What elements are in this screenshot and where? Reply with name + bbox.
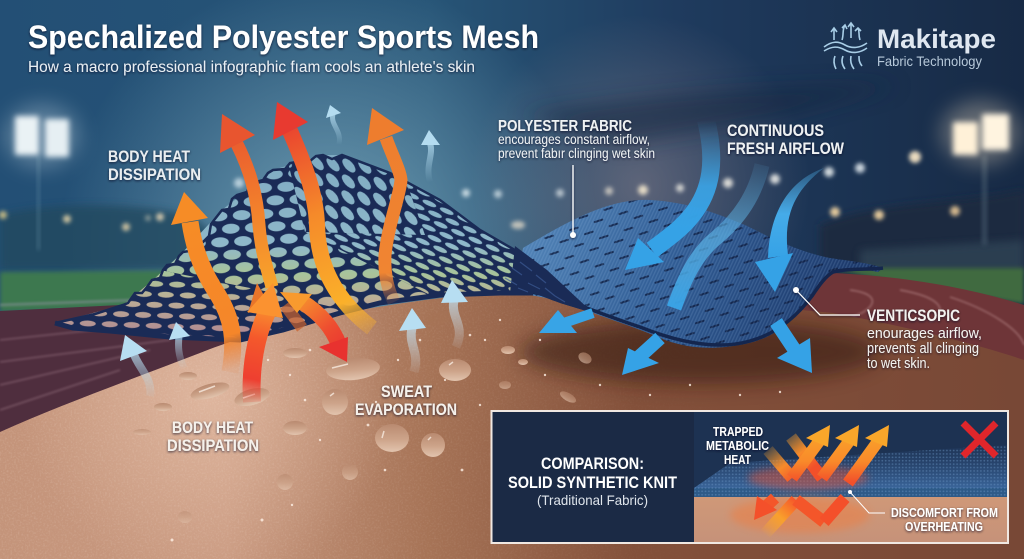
title block bbox=[28, 19, 539, 76]
callout: polyester fabric: encourages constant airflow, bbox=[498, 132, 650, 147]
bokeh lights bbox=[0, 151, 960, 231]
comparison heading bbox=[508, 455, 677, 508]
solid woven fabric section bbox=[515, 200, 883, 348]
brand tagline: Fabric Technology bbox=[877, 53, 982, 69]
comparison heading: SOLID SYNTHETIC KNIT bbox=[508, 474, 677, 492]
callout: venticsopic: VENTICSOPIC bbox=[867, 307, 960, 325]
label: trapped metabolic heat: METABOLIC bbox=[706, 439, 769, 453]
arrow: orange heat arrow 4 bbox=[367, 108, 404, 302]
label: continuous fresh airflow: FRESH AIRFLOW bbox=[727, 139, 845, 158]
title: Spechalized Polyester Sports Mesh bbox=[28, 19, 539, 55]
label: body heat dissipation bottom: BODY HEAT bbox=[172, 419, 253, 437]
callout: polyester fabric: prevent fabır clinging wet skin bbox=[498, 146, 655, 161]
panel: comparison solid synthetic knit bbox=[492, 411, 1008, 543]
label: body heat dissipation top: BODY HEAT bbox=[108, 147, 191, 166]
label: continuous fresh airflow bbox=[727, 121, 845, 158]
comparison heading: (Traditional Fabric) bbox=[537, 492, 648, 508]
arrow: orange-red heat arrow 2 bbox=[220, 114, 272, 313]
label: sweat evaporation: EVAPORATION bbox=[355, 401, 457, 419]
arrow: large orange heat arrow 1 bbox=[171, 192, 233, 372]
skin speckles bbox=[170, 319, 781, 542]
label: body heat dissipation bottom bbox=[167, 419, 259, 455]
arrow: orange-red return arrow to droplet bbox=[280, 292, 348, 362]
label: body heat dissipation top bbox=[108, 147, 201, 184]
arrow: vapor arrows rising from skin bbox=[120, 280, 468, 396]
arrow: red-to-yellow heat arrow 3 bbox=[273, 102, 372, 328]
downward heat arrows in skin bbox=[762, 498, 845, 534]
callout: polyester fabric bbox=[498, 118, 655, 238]
open hexagonal mesh section bbox=[54, 154, 586, 342]
comparison heading: COMPARISON: bbox=[541, 455, 644, 473]
callout: discomfort from overheating: OVERHEATING bbox=[905, 520, 983, 534]
label: continuous fresh airflow: CONTINUOUS bbox=[727, 121, 824, 140]
brand name: Makitape bbox=[877, 24, 996, 54]
icon: red cross bbox=[963, 423, 996, 456]
icon: logo arrows and waves bbox=[824, 23, 867, 69]
label: trapped metabolic heat: HEAT bbox=[724, 453, 751, 467]
logo: Makitape bbox=[824, 23, 996, 69]
callout: venticsopic: prevents all clinging bbox=[867, 341, 979, 357]
label: trapped metabolic heat: TRAPPED bbox=[713, 425, 763, 439]
stadium floodlight right bbox=[941, 101, 1021, 245]
callout: polyester fabric: POLYESTER FABRIC bbox=[498, 118, 632, 135]
label: sweat evaporation: SWEAT bbox=[381, 383, 432, 401]
label: trapped metabolic heat bbox=[706, 425, 769, 467]
callout: discomfort from overheating bbox=[848, 490, 998, 534]
skin surface with sweat bbox=[0, 296, 1024, 559]
sweat droplets bbox=[133, 308, 594, 523]
stadium floodlight left bbox=[4, 104, 80, 250]
callout: venticsopic: enourages airflow, bbox=[867, 326, 982, 342]
arrow: fresh airflow arrow left bbox=[625, 120, 711, 270]
arrow: small evaporation wisps above mesh bbox=[326, 105, 440, 182]
label: body heat dissipation top: DISSIPATION bbox=[108, 165, 201, 184]
trapped heat arrows bbox=[768, 437, 879, 483]
arrow: fresh airflow arrow centre bbox=[622, 165, 762, 375]
arrow: fresh airflow arrow right bbox=[755, 168, 824, 373]
subtitle: How a macro professional infographic fıam cools an athlete's skin bbox=[28, 59, 475, 76]
arrow: red rising heat arrow bbox=[247, 283, 283, 402]
callout: discomfort from overheating: DISCOMFORT FROM bbox=[891, 506, 998, 520]
label: body heat dissipation bottom: DISSIPATION bbox=[167, 437, 259, 455]
callout: venticsopic bbox=[793, 287, 982, 372]
arrow: exit airflow arrow lower left bbox=[539, 310, 593, 333]
comparison diagram bbox=[694, 412, 1007, 542]
callout: venticsopic: to wet skin. bbox=[867, 356, 930, 372]
label: sweat evaporation bbox=[355, 383, 457, 419]
